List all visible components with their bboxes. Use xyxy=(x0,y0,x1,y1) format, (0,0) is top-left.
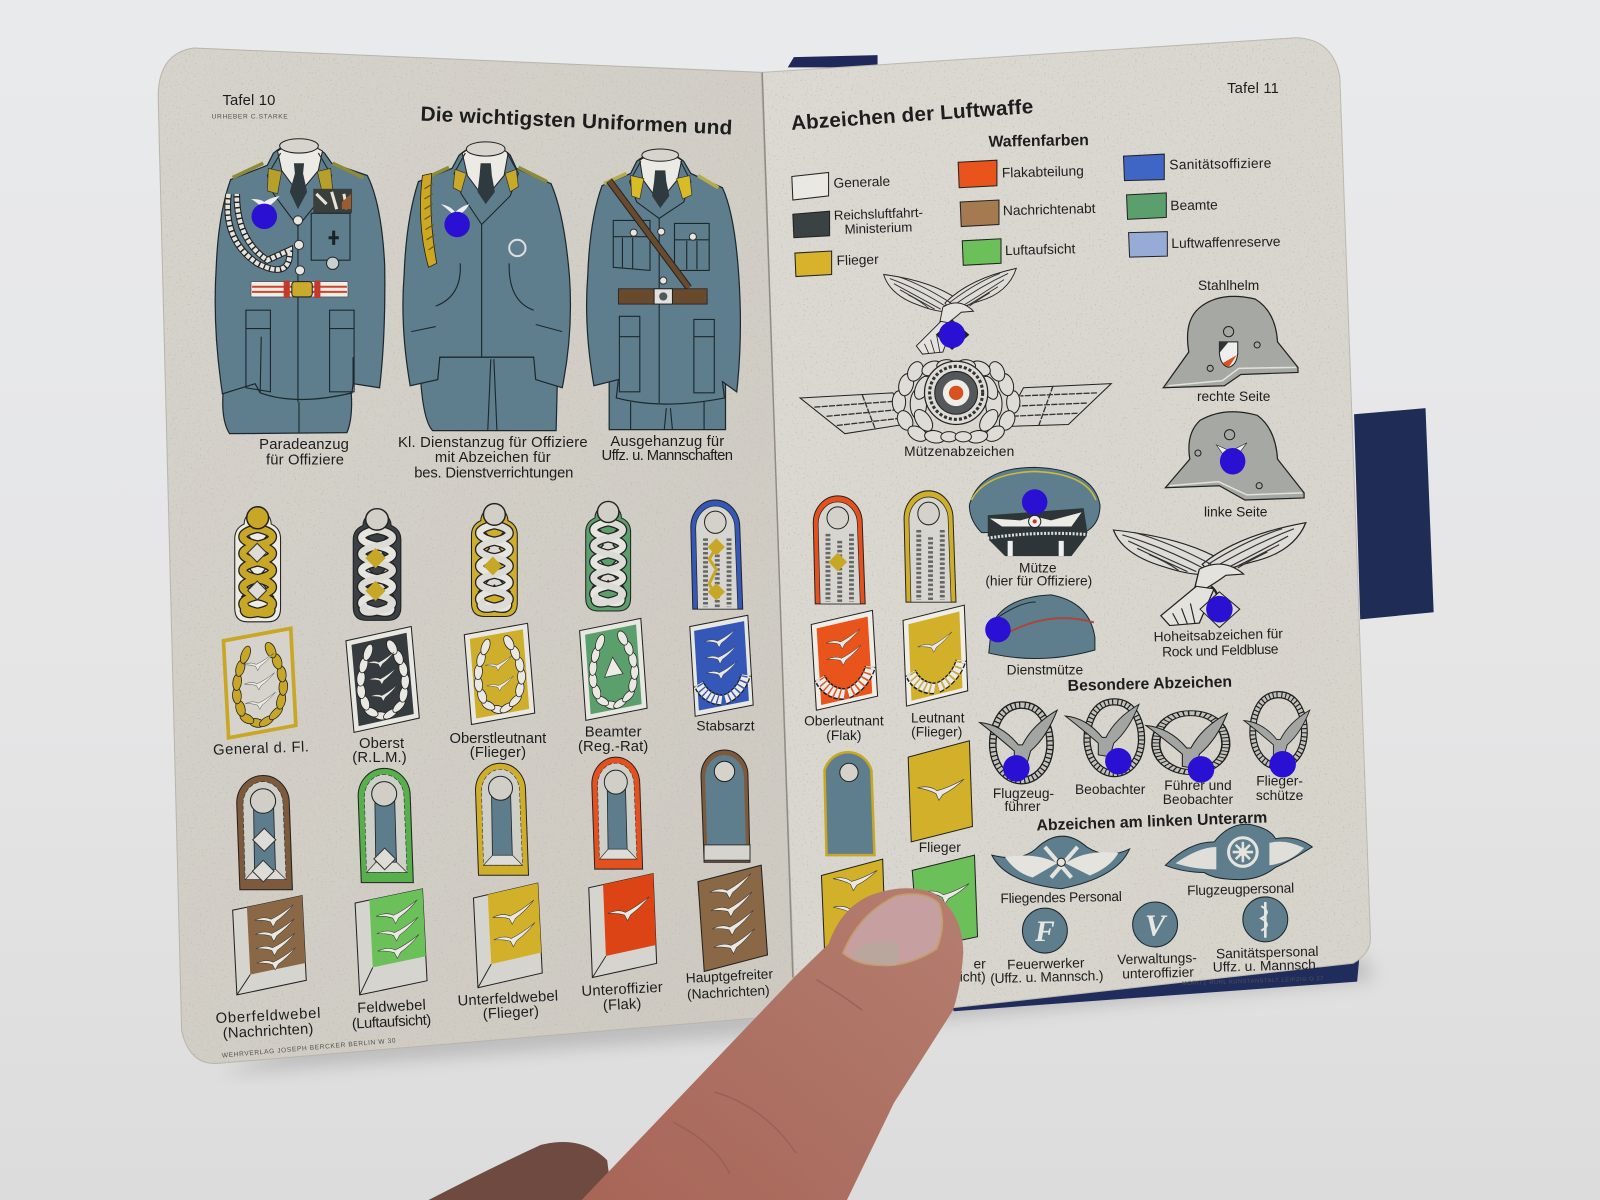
rank: Oberfeldwebel: (Nachrichten) xyxy=(222,1021,314,1042)
rank: Oberst: Oberst xyxy=(359,736,404,752)
patch: Fliegendes Personal: Fliegendes Personal xyxy=(1000,889,1122,906)
badge: Fliegerschütze: schütze xyxy=(1256,788,1304,803)
paper speckle xyxy=(153,31,1378,1071)
rank: Stabsarzt: Stabsarzt xyxy=(696,719,755,734)
badge: Fliegerschütze: Flieger- xyxy=(1256,774,1303,789)
rank: Hauptgefreiter xyxy=(685,750,774,1002)
legend: Waffenfarben swatches: Beamte xyxy=(1170,197,1218,213)
uniform captions: Ausgehanzug für xyxy=(610,434,724,450)
Gefreiter tabs partly hidden by finger xyxy=(821,855,986,985)
Leutnant Flieger xyxy=(903,491,968,740)
page shadow xyxy=(219,959,1372,1073)
caption: Mütze: Mütze xyxy=(1019,560,1057,575)
rank: Oberstleutnant: Oberstleutnant xyxy=(449,731,546,747)
Leutnant Flieger: Leutnant xyxy=(911,710,965,725)
rank: Unteroffizier: (Flak) xyxy=(603,996,642,1014)
officer cap xyxy=(969,467,1100,556)
Oberleutnant Flak: (Flak) xyxy=(826,728,861,743)
badge: Flugzeugführer: Flugzeug- xyxy=(993,786,1054,801)
legend: Waffenfarben swatches xyxy=(792,154,1281,277)
Gefreiter tabs partly hidden by finger: er xyxy=(973,956,986,971)
caption: Hoheitsabzeichen xyxy=(1153,626,1283,660)
sleeve badge: Feuerwerker xyxy=(990,908,1104,986)
rank: Unteroffizier: Unteroffizier xyxy=(581,980,663,1000)
heading: Abzeichen am linken Unterarm: Abzeichen am linken Unterarm xyxy=(1036,810,1268,835)
Flieger board and tab: Flieger xyxy=(919,840,961,855)
blue censor dots xyxy=(252,204,1296,783)
legend: Waffenfarben swatches: Reichsluftfahrt- xyxy=(834,205,923,223)
rank: General d. Fl. xyxy=(213,507,309,759)
uniform captions: Paradeanzug xyxy=(259,437,349,453)
badge: Führer und Beobachter xyxy=(1146,713,1234,807)
blue book cover xyxy=(788,55,1359,1011)
sleeve badge: Feuerwerker: F xyxy=(1034,916,1055,948)
rank: General d. Fl.: General d. Fl. xyxy=(213,739,309,759)
strap xyxy=(1354,408,1434,619)
sleeve badge: Verwaltungsunteroffizier: V xyxy=(1145,909,1168,943)
legend: Waffenfarben swatches: Luftaufsicht xyxy=(1005,241,1076,258)
left page heading: URHEBER C.STARKE xyxy=(212,113,288,120)
field cap: Dienstmütze xyxy=(1007,662,1083,677)
uniform: Kl. Dienstanzug xyxy=(403,142,570,431)
rank: Oberstleutnant xyxy=(449,504,546,761)
gutter xyxy=(762,72,793,978)
Flieger board and tab xyxy=(824,741,972,855)
rank: Feldwebel: (Luftaufsicht) xyxy=(351,1012,432,1033)
helmet: rechte Seite xyxy=(1163,278,1298,404)
icon: cap badge xyxy=(800,358,1111,445)
sleeve badge: Verwaltungsunteroffizier: Verwaltungs- xyxy=(1117,950,1197,967)
caption: Hoheitsabzeichen: Hoheitsabzeichen für xyxy=(1153,626,1283,644)
sleeve badge: Verwaltungsunteroffizier: unteroffizier xyxy=(1122,965,1194,981)
rank: Unterfeldwebel xyxy=(457,763,559,1023)
legend: Waffenfarben swatches: Generale xyxy=(833,174,891,191)
left page heading: Tafel 10 xyxy=(222,93,275,109)
rank: Feldwebel: Feldwebel xyxy=(357,997,426,1017)
heading: Besondere Abzeichen: Besondere Abzeichen xyxy=(1067,674,1232,695)
legend: Waffenfarben swatches: Sanitätsoffiziere xyxy=(1169,156,1272,172)
helmet: rechte Seite: rechte Seite xyxy=(1197,389,1271,404)
rank: Stabsarzt xyxy=(690,500,755,734)
hand at bottom xyxy=(429,1142,612,1200)
icon: breast eagle xyxy=(1113,523,1306,628)
badge: Beobachter xyxy=(1065,702,1146,797)
legend: Waffenfarben swatches: Flieger xyxy=(836,252,879,268)
left page xyxy=(158,48,801,1064)
rank: Hauptgefreiter: Hauptgefreiter xyxy=(685,966,774,986)
right page heading xyxy=(790,81,1279,151)
badge: Beobachter: Beobachter xyxy=(1075,782,1146,797)
patch: Flugzeugpersonal xyxy=(1165,824,1312,898)
caption: Hoheitsabzeichen: Rock und Feldbluse xyxy=(1162,642,1279,660)
rank: Hauptgefreiter: (Nachrichten) xyxy=(687,983,770,1002)
Gefreiter tabs partly hidden by finger: sicht) xyxy=(953,970,986,985)
rank: Oberfeldwebel: Oberfeldwebel xyxy=(215,1006,321,1027)
rank: Oberstleutnant: (Flieger) xyxy=(470,745,526,761)
left page imprint: WEHRVERLAG JOSEPH BERCKER BERLIN W 30 xyxy=(222,1037,397,1060)
Oberleutnant Flak xyxy=(804,496,884,743)
sleeve badge: Verwaltungsunteroffizier xyxy=(1117,902,1197,981)
patch: Flugzeugpersonal: Flugzeugpersonal xyxy=(1187,880,1294,898)
right page xyxy=(761,38,1370,1026)
badge: Flugzeugführer: führer xyxy=(1004,799,1041,814)
sleeve badge: Feuerwerker: (Uffz. u. Mannsch.) xyxy=(990,968,1104,986)
sleeve badge: Feuerwerker: Feuerwerker xyxy=(1007,955,1085,972)
badge: Flugzeugführer xyxy=(980,705,1057,814)
Oberleutnant Flak: Oberleutnant xyxy=(804,714,884,729)
uniform captions: mit Abzeichen für xyxy=(435,450,551,466)
caption: Mütze: (hier für Offiziere) xyxy=(985,574,1092,589)
badge: Führer und Beobachter: Beobachter xyxy=(1163,792,1234,807)
left page heading xyxy=(212,93,733,140)
rank: Oberfeldwebel xyxy=(215,776,321,1042)
rank: Unterfeldwebel: (Flieger) xyxy=(482,1004,540,1023)
legend: Waffenfarben swatches: Flakabteilung xyxy=(1002,163,1084,181)
right page heading: Waffenfarben xyxy=(988,132,1089,151)
uniform captions: für Offiziere xyxy=(266,452,344,468)
sleeve badge: Sanitätspersonal xyxy=(1213,897,1320,975)
rank: Unteroffizier xyxy=(581,757,663,1014)
right page heading: Tafel 11 xyxy=(1227,81,1279,97)
rank: Oberst: (R.L.M.) xyxy=(352,750,407,766)
icon: eagle emblem xyxy=(884,268,1016,354)
uniform captions: Uffz. u. Mannschaften xyxy=(602,448,733,464)
patch: Fliegendes Personal xyxy=(992,836,1130,906)
right page imprint: MORITZ RUHL KUNSTANSTALT LEIPZIG O 27 xyxy=(1182,976,1324,987)
rank: Feldwebel xyxy=(351,768,432,1033)
helmet: rechte Seite: Stahlhelm xyxy=(1198,278,1259,293)
uniform: Ausgehanzug xyxy=(587,149,740,430)
rank: Oberst xyxy=(346,509,419,766)
Leutnant Flieger: (Flieger) xyxy=(911,725,962,740)
legend: Waffenfarben swatches: Luftwaffenreserve xyxy=(1171,234,1281,251)
rank: Beamter: (Reg.-Rat) xyxy=(578,739,649,755)
uniform captions: Kl. Dienstanzug für Offiziere xyxy=(398,435,588,451)
caption: Mützenabzeichen: Mützenabzeichen xyxy=(904,444,1014,459)
badge: Fliegerschütze xyxy=(1244,695,1310,803)
field cap xyxy=(989,595,1095,677)
right page heading: Abzeichen der Luftwaffe xyxy=(790,96,1034,135)
legend: Waffenfarben swatches: Ministerium xyxy=(844,219,913,237)
finger xyxy=(582,888,963,1200)
uniform captions xyxy=(259,434,733,482)
rank: Beamter xyxy=(578,501,649,755)
helmet: linke Seite: linke Seite xyxy=(1204,504,1268,519)
caption: Mütze xyxy=(985,560,1092,589)
left page heading: Die wichtigsten Uniformen und xyxy=(420,103,733,140)
sleeve badge: Sanitätspersonal: Uffz. u. Mannsch. xyxy=(1213,957,1320,975)
rank: Beamter: Beamter xyxy=(585,725,642,741)
sleeve badge: Sanitätspersonal: Sanitätspersonal xyxy=(1216,944,1319,961)
badge: Führer und Beobachter: Führer und xyxy=(1164,778,1232,793)
uniform: Paradeanzug xyxy=(215,139,385,434)
helmet: linke Seite xyxy=(1165,412,1304,519)
uniform captions: bes. Dienstverrichtungen xyxy=(414,466,573,482)
rank: Unterfeldwebel: Unterfeldwebel xyxy=(457,988,559,1010)
legend: Waffenfarben swatches: Nachrichtenabt xyxy=(1003,201,1096,218)
